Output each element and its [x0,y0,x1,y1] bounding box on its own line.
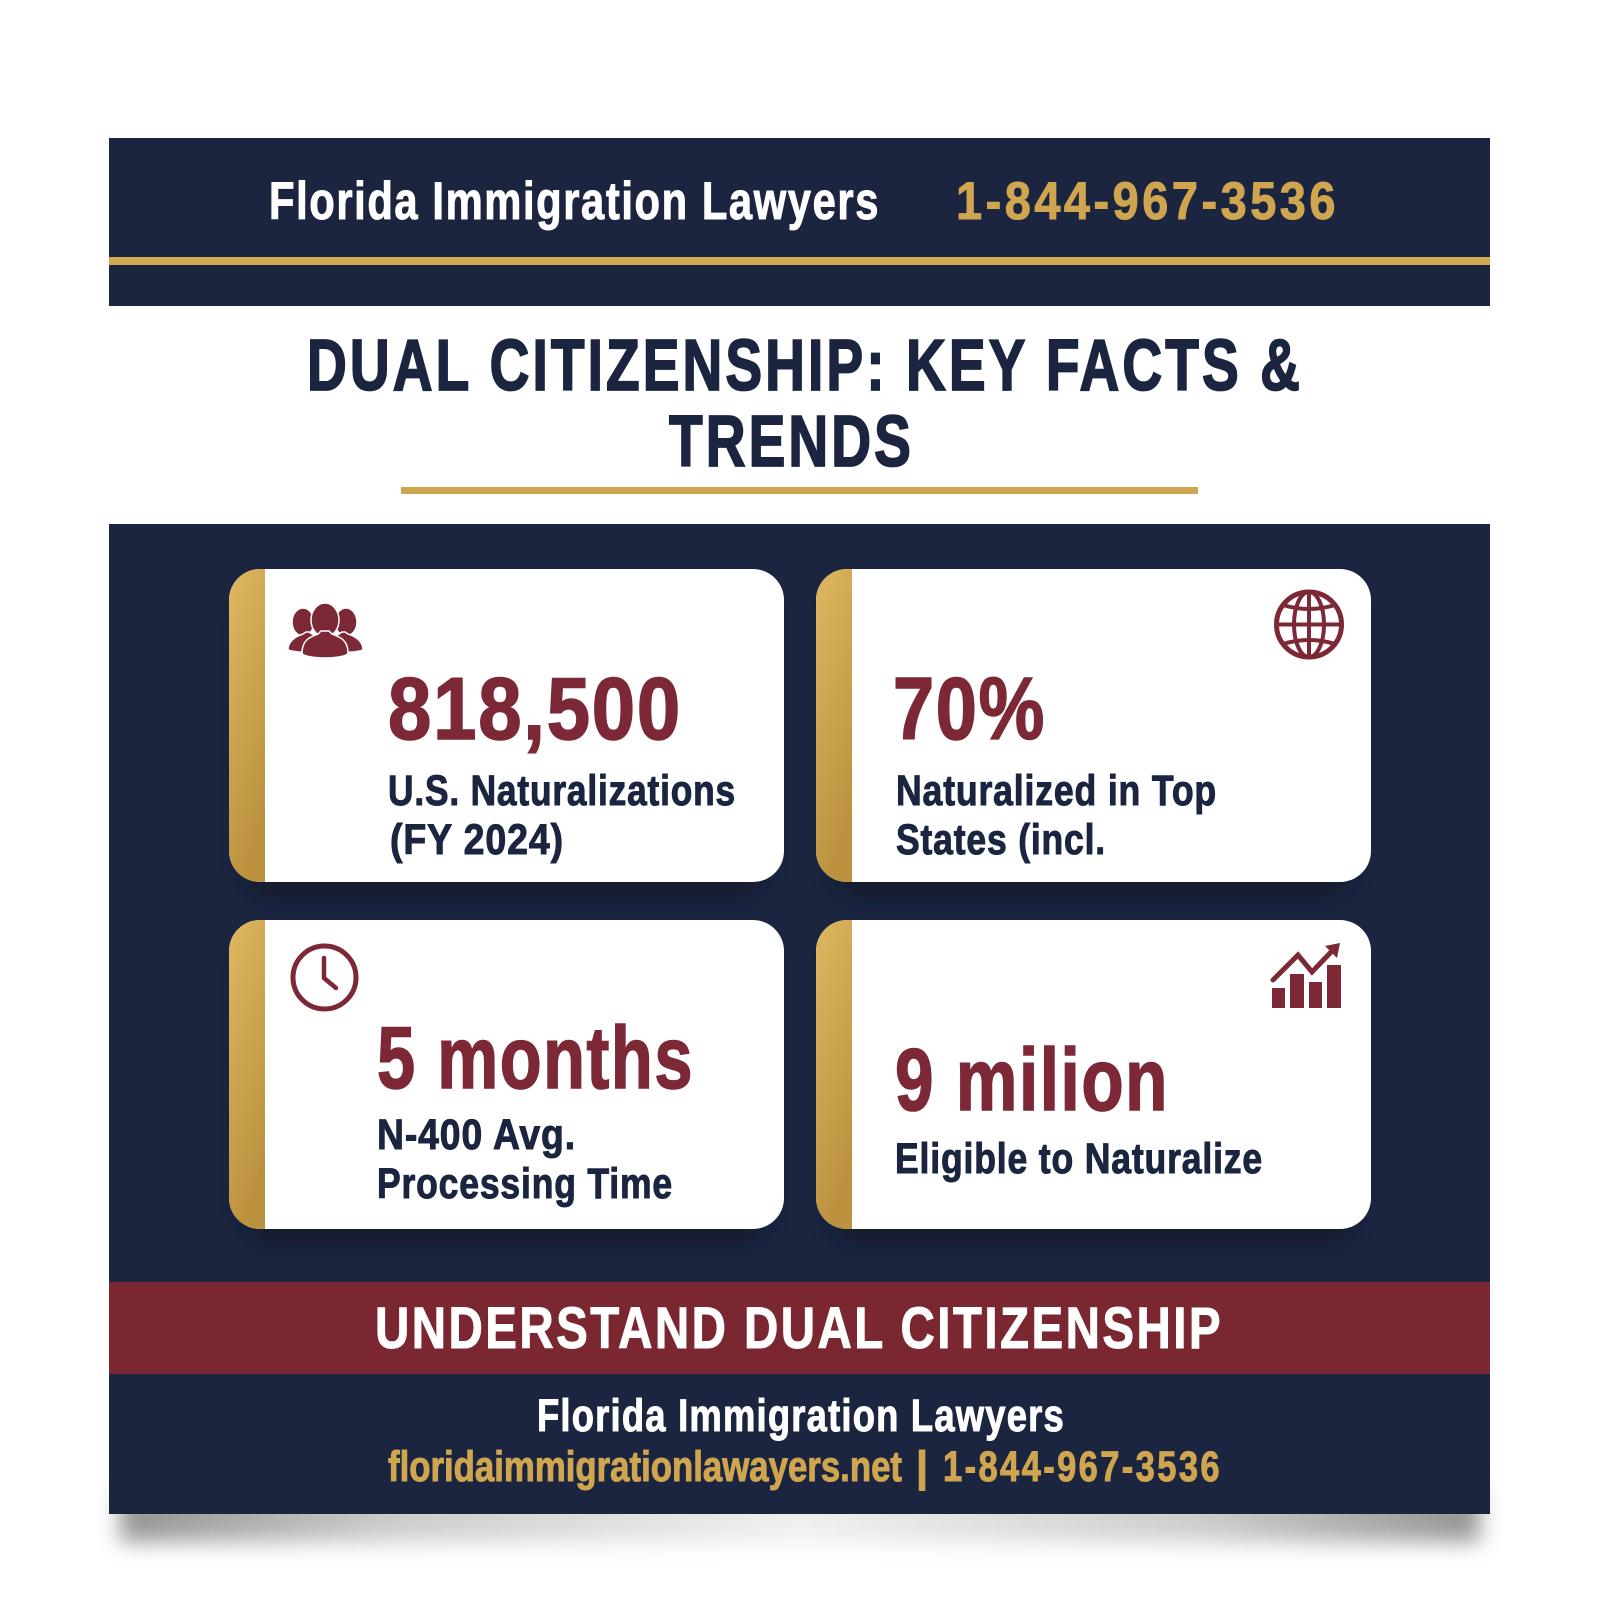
label: N-400 Avg. Processing Time [377,1111,673,1208]
label: U.S. Naturalizations (FY 2024): (FY 2024) [390,816,564,864]
footer separator: | [916,1443,928,1491]
title underline [401,487,1198,494]
poster panel [109,138,1490,1514]
footer contact [388,1390,1222,1491]
header firm name: Florida Immigration Lawyers [269,172,880,231]
label: Naturalized in Top States: Naturalized in Top [896,767,1217,815]
footer firm name: Florida Immigration Lawyers [537,1390,1065,1441]
card: naturalizations [229,569,784,898]
label: N-400 Avg. Processing Time: N-400 Avg. [377,1111,576,1159]
label: Naturalized in Top States [896,767,1217,864]
title section [109,306,1490,524]
label: U.S. Naturalizations (FY 2024) [388,767,736,864]
drop shadow under poster [120,1490,1480,1542]
title line 2: TRENDS [669,402,914,482]
label: Naturalized in Top States: States (incl. [896,816,1106,864]
label: Eligible to Naturalize: Eligible to Naturalize [895,1135,1263,1183]
statistic: 818,500: 818,500 [388,659,682,758]
statistic: 5 months: 5 months [377,1008,694,1107]
label: N-400 Avg. Processing Time: Processing Time [377,1160,673,1208]
header phone number: 1-844-967-3536 [956,172,1339,231]
card: top states [816,569,1371,898]
icon: clock [293,946,356,1009]
card: eligible to naturalize [816,920,1371,1245]
icon: people [288,603,363,658]
footer website: floridaimmigrationlawayers.net [388,1443,902,1491]
statistic: 9 milion: 9 milion [895,1030,1169,1129]
header bar [109,172,1490,265]
title line 1: DUAL CITIZENSHIP: KEY FACTS & [307,326,1303,406]
icon: rising bar chart [1272,943,1341,1008]
call to action banner [109,1282,1490,1374]
footer phone: 1-844-967-3536 [943,1443,1222,1491]
banner text: UNDERSTAND DUAL CITIZENSHIP [375,1296,1223,1361]
header gold rule [109,257,1490,265]
statistic: 70%: 70% [893,659,1046,758]
icon: globe [1276,592,1342,657]
label: U.S. Naturalizations (FY 2024): U.S. Naturalizations [388,767,736,815]
card: processing time [229,920,784,1245]
